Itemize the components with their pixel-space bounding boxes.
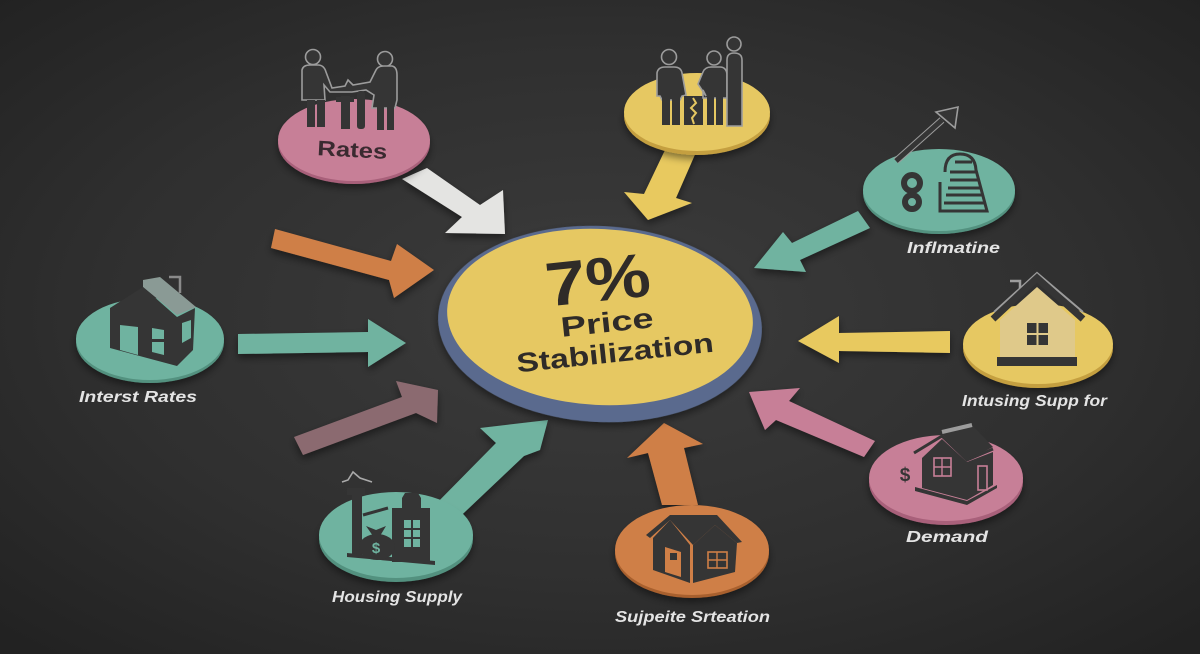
node: Inflation <box>863 107 1015 257</box>
arrow: orange from bottom <box>627 423 703 505</box>
icon: family group <box>657 37 742 126</box>
arrow: teal from housing supply <box>430 420 548 528</box>
label: Intusing Supply: Intusing Supp for <box>962 393 1108 410</box>
label: Housing Supply: Housing Supply <box>332 589 463 606</box>
icon: two houses <box>646 515 742 583</box>
hub text: Price: Price <box>559 302 655 343</box>
arrow: yellow from top <box>624 150 697 220</box>
node: Intusing Supply <box>962 273 1113 410</box>
arrow: white from rates <box>402 168 505 234</box>
node: top yellow <box>624 37 770 155</box>
arrow: mauve lower left <box>294 381 438 455</box>
hub text: Stabilization: Stabilization <box>515 328 715 378</box>
central hub: 7% price stabilization <box>433 218 767 430</box>
hub text: 7%: 7% <box>542 241 654 320</box>
label: bottom orange: Sujpeite Srteation <box>615 609 770 626</box>
icon: buildings and money bag: $ <box>372 540 381 557</box>
node: Interest Rates <box>76 277 224 406</box>
label: Rates: Rates <box>317 137 388 164</box>
arrow: yellow from right <box>798 316 950 363</box>
arrow: teal left <box>238 319 406 367</box>
arrow: orange upper left <box>271 229 434 298</box>
icon: family holding hands <box>302 50 397 130</box>
icon: house <box>110 277 196 366</box>
icon: buildings and money bag <box>342 472 435 565</box>
label: Interest Rates: Interst Rates <box>79 389 197 406</box>
icon: rising arrow, gears and silo <box>896 107 987 211</box>
arrow: pink from demand <box>749 388 875 457</box>
node: Demand <box>869 425 1023 546</box>
node: bottom orange <box>615 505 770 626</box>
node: Housing Supply <box>319 472 473 606</box>
node: Rates <box>278 50 430 184</box>
arrow: teal from inflation <box>754 211 870 272</box>
label: Inflation: Inflmatine <box>907 240 1000 257</box>
icon: house <box>993 273 1083 366</box>
icon: house with dollar <box>900 425 997 505</box>
label: Demand: Demand <box>906 529 990 546</box>
icon: house with dollar: $ <box>900 465 911 486</box>
